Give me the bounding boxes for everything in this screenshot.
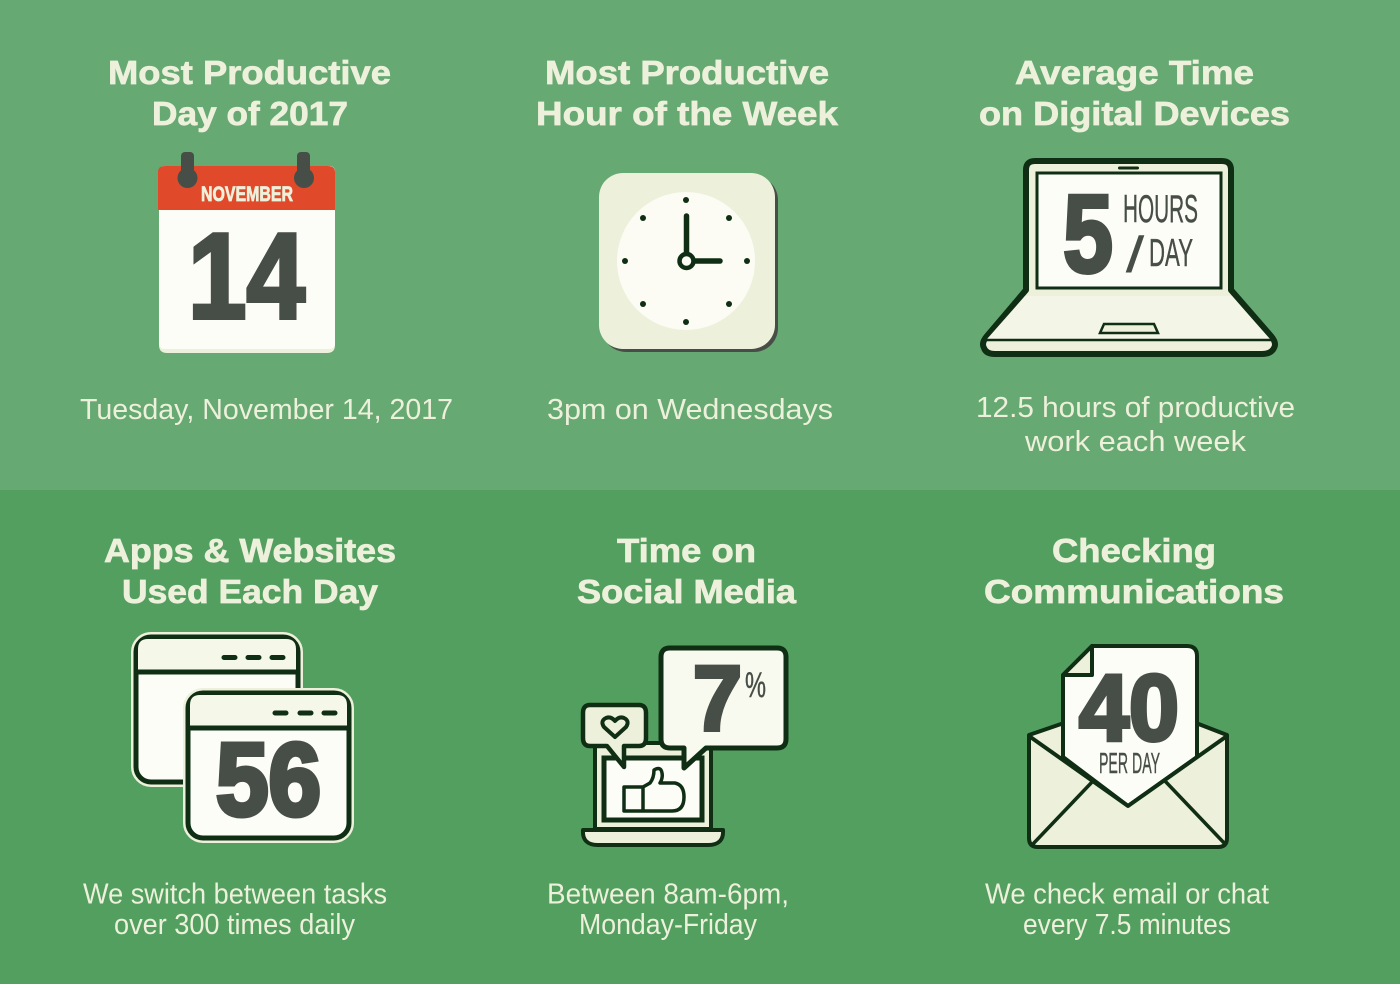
caption: productive work	[976, 392, 1295, 458]
caption: productive work: 12.5 hours of productive	[976, 392, 1295, 424]
icon: social laptop and speech bubbles	[583, 648, 786, 845]
heading: checking communications: Checking	[1052, 532, 1216, 569]
icon: laptop	[983, 161, 1275, 354]
heading: apps and websites: Apps & Websites	[104, 532, 396, 569]
panel: apps and websites	[83, 532, 396, 941]
icon: calendar: 14	[188, 208, 305, 344]
caption: date: Tuesday, November 14, 2017	[80, 394, 453, 426]
caption: productive work: work each week	[1024, 426, 1247, 458]
icon: laptop: /	[1126, 227, 1144, 283]
caption: check frequency: We check email or chat	[985, 878, 1269, 910]
icon: envelope with letter	[1029, 646, 1227, 847]
icon: envelope with letter: 40	[1079, 655, 1179, 760]
heading: social media: Social Media	[577, 573, 797, 610]
heading: apps and websites: Used Each Day	[122, 573, 379, 610]
heading: digital devices	[979, 54, 1290, 132]
heading: apps and websites	[104, 532, 396, 610]
icon: calendar: NOVEMBER	[201, 183, 293, 206]
caption: task switching: over 300 times daily	[114, 909, 355, 941]
background: bottom band	[0, 490, 1400, 984]
caption: social media time: Monday-Friday	[579, 909, 757, 941]
heading: digital devices: on Digital Devices	[979, 95, 1290, 132]
panel: time on digital devices	[976, 54, 1295, 458]
icon: social laptop and speech bubbles: %	[745, 666, 766, 705]
caption: task switching: We switch between tasks	[83, 878, 387, 910]
caption: social media time: Between 8am-6pm,	[547, 878, 789, 910]
caption: hour: 3pm on Wednesdays	[547, 394, 833, 426]
panel: most productive hour	[536, 54, 839, 426]
caption: social media time	[547, 878, 789, 941]
icon: browser windows: 56	[216, 722, 321, 837]
heading: most productive day	[108, 54, 391, 132]
icon: laptop: 5	[1063, 173, 1113, 296]
background: top band	[0, 0, 1400, 490]
icon: browser windows	[136, 637, 349, 838]
heading: digital devices: Average Time	[1015, 54, 1254, 91]
panel: most productive day	[80, 54, 453, 426]
panel: social media	[547, 532, 797, 941]
heading: most productive day: Most Productive	[108, 54, 391, 91]
heading: most productive hour: Hour of the Week	[536, 95, 839, 132]
heading: social media: Time on	[617, 532, 756, 569]
icon: social laptop and speech bubbles: 7	[693, 648, 742, 750]
heading: most productive hour: Most Productive	[545, 54, 829, 91]
caption: check frequency	[985, 878, 1269, 941]
panel: checking communications	[984, 532, 1284, 941]
heading: most productive hour	[536, 54, 839, 132]
icon: envelope with letter: PER DAY	[1099, 748, 1160, 780]
icon: laptop: DAY	[1149, 232, 1193, 275]
heading: most productive day: Day of 2017	[152, 95, 348, 132]
icon: laptop: HOURS	[1123, 188, 1198, 231]
caption: task switching	[83, 878, 387, 941]
caption: check frequency: every 7.5 minutes	[1023, 909, 1231, 941]
icon: clock	[599, 173, 778, 352]
icon: calendar	[158, 152, 335, 353]
heading: checking communications	[984, 532, 1284, 610]
heading: checking communications: Communications	[984, 573, 1284, 610]
heading: social media	[577, 532, 797, 610]
